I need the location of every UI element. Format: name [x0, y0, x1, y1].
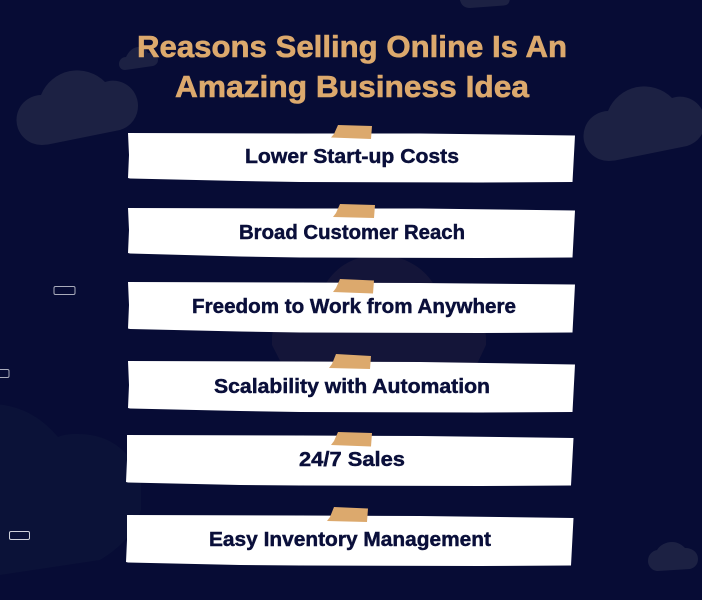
card: Broad Customer Reach [128, 204, 575, 258]
label: Broad Customer Reach [239, 222, 465, 244]
background cloud: right [583, 86, 702, 161]
card: Scalability with Automation [128, 354, 575, 412]
card: Easy Inventory Management [126, 507, 574, 566]
small outlined rectangle at left edge [0, 370, 9, 378]
small outlined rectangle [54, 286, 75, 294]
tape [331, 432, 372, 446]
background cloud: centre [272, 255, 486, 400]
tape [333, 279, 374, 294]
label: 24/7 Sales [299, 449, 405, 471]
title: Amazing Business Idea [175, 69, 530, 104]
background cloud: large bottom left [0, 404, 141, 577]
small outlined rectangle lower left [10, 532, 30, 540]
title [137, 29, 567, 104]
label: Lower Start-up Costs [245, 146, 459, 168]
label: Freedom to Work from Anywhere [192, 296, 516, 318]
card: Freedom to Work from Anywhere [128, 279, 575, 333]
tape [333, 204, 375, 218]
tape [329, 354, 371, 369]
background cloud: upper left [16, 70, 138, 145]
tape [327, 507, 368, 522]
background cloud: small bottom right [648, 542, 698, 571]
label: Scalability with Automation [214, 376, 490, 398]
background cloud: small by title [119, 47, 158, 70]
background cloud: top edge [459, 0, 510, 8]
card: Lower Start-up Costs [128, 125, 575, 182]
title: Reasons Selling Online Is An [137, 29, 567, 64]
label: Easy Inventory Management [209, 529, 491, 551]
tape [331, 125, 372, 139]
card: 24/7 Sales [126, 432, 574, 486]
